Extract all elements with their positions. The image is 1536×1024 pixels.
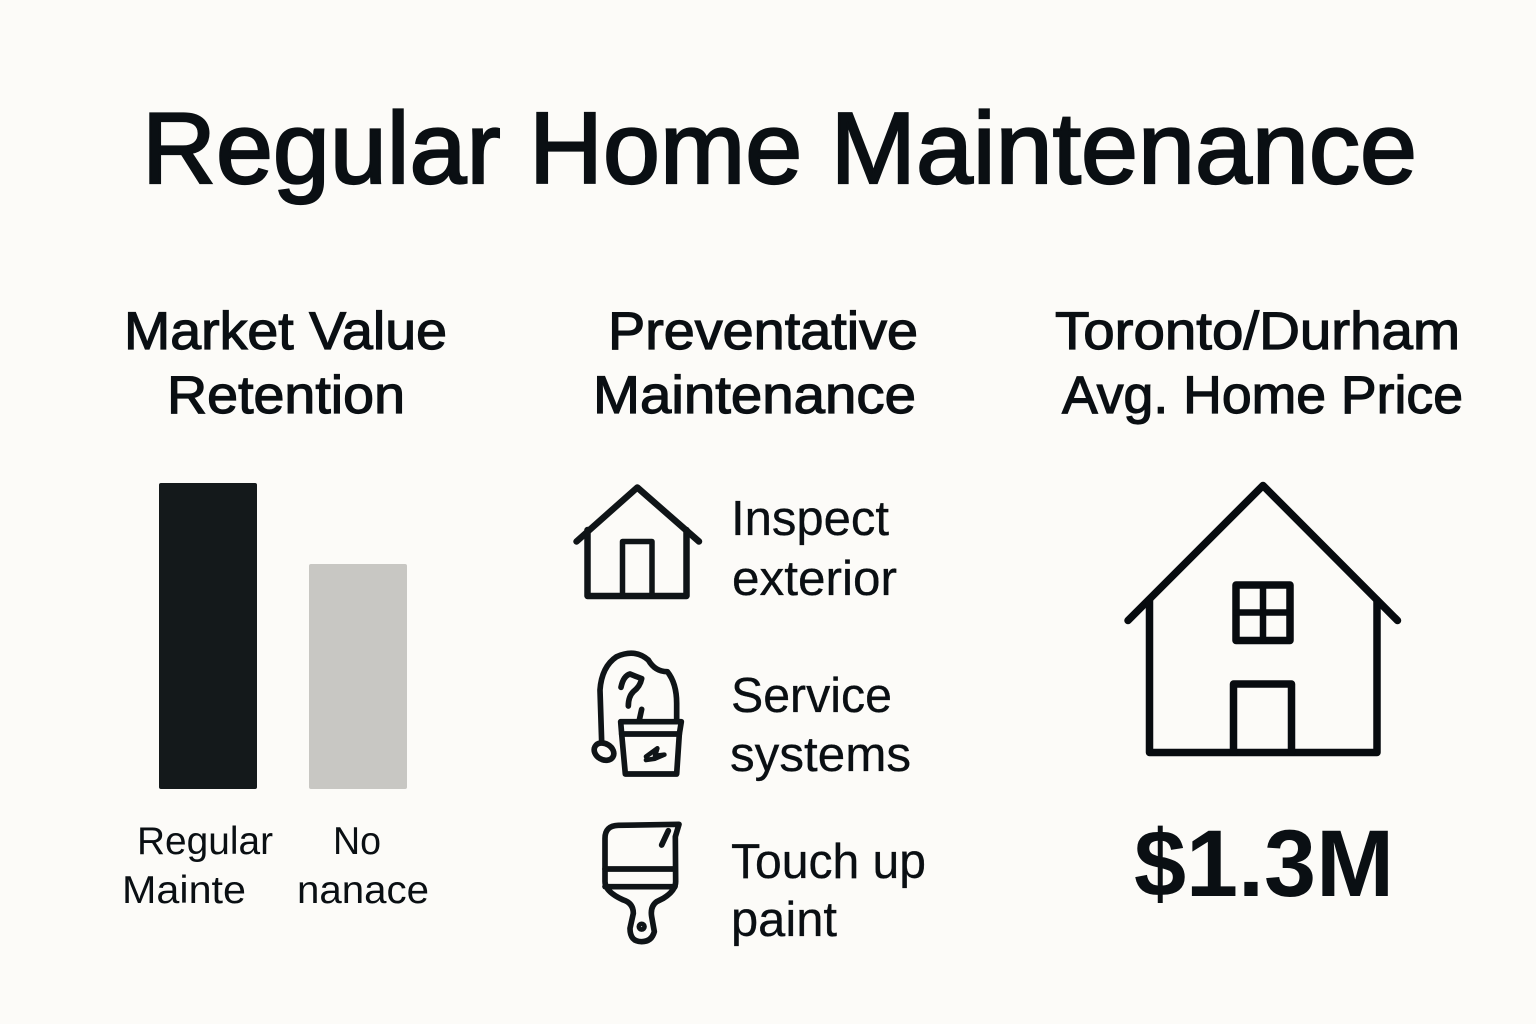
bar label: no maintenance xyxy=(297,820,429,912)
text: touch up paint: Touch up xyxy=(731,835,926,889)
panel: market value retention xyxy=(122,302,447,912)
heading: toronto durham average home price: Toronto/Durham xyxy=(1055,302,1460,361)
heading: market value retention xyxy=(124,302,447,425)
panel: preventative maintenance xyxy=(576,302,926,947)
heading: preventative maintenance: Preventative xyxy=(608,302,918,361)
text: touch up paint: paint xyxy=(731,893,837,947)
icon: service bucket and hose xyxy=(591,653,681,774)
heading: preventative maintenance: Maintenance xyxy=(593,366,916,425)
heading: market value retention: Market Value xyxy=(124,302,447,361)
heading: toronto durham average home price: Avg. Home Price xyxy=(1062,366,1463,425)
price figure: $1.3M xyxy=(1134,811,1394,917)
bar: regular maintenance xyxy=(159,483,257,789)
heading: preventative maintenance xyxy=(593,302,918,425)
bar label: no maintenance: No xyxy=(333,820,381,863)
text: touch up paint xyxy=(731,835,926,947)
icon: large house xyxy=(1128,486,1398,752)
text: service systems: Service xyxy=(731,669,892,723)
text: inspect exterior xyxy=(731,492,897,606)
heading: toronto durham average home price xyxy=(1055,302,1463,425)
heading: market value retention: Retention xyxy=(167,366,405,425)
panel: toronto durham average home price xyxy=(1055,302,1463,917)
text: inspect exterior: exterior xyxy=(732,552,897,606)
icon: paint brush xyxy=(605,824,679,942)
text: service systems: systems xyxy=(730,728,911,782)
bar label: regular maintenance: Regular xyxy=(137,820,273,863)
bar: no maintenance xyxy=(309,564,407,789)
title: Regular Home Maintenance xyxy=(142,93,1417,205)
icon: small house xyxy=(576,488,699,596)
bar chart xyxy=(122,483,429,912)
bar label: regular maintenance: Mainte xyxy=(122,869,246,912)
text: service systems xyxy=(730,669,911,782)
bar label: regular maintenance xyxy=(122,820,273,912)
text: inspect exterior: Inspect xyxy=(731,492,889,546)
bar label: no maintenance: nanace xyxy=(297,869,429,912)
